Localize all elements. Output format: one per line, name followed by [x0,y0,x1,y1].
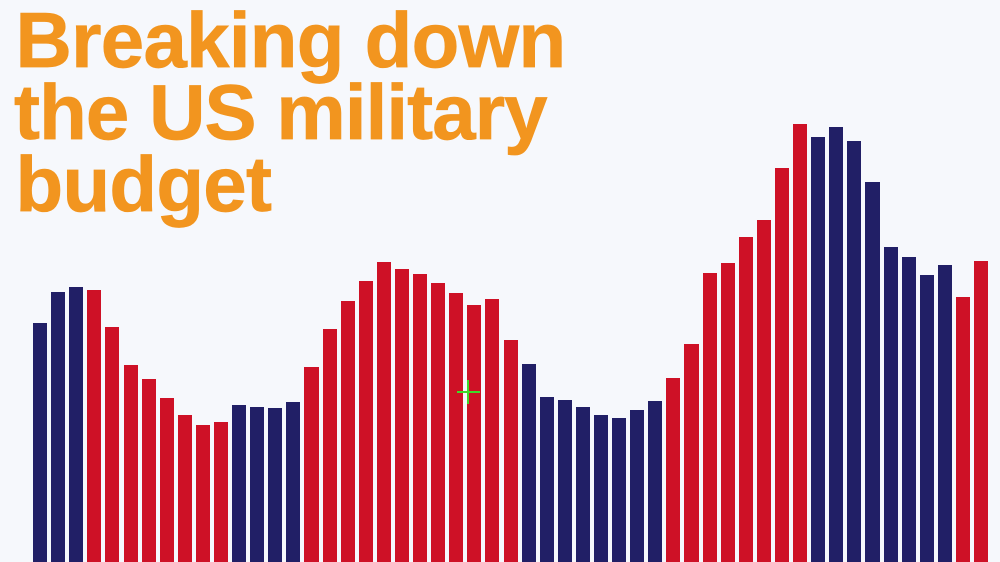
title: the US military [14,68,547,156]
title: budget [16,140,272,228]
icon: green crosshair cursor [457,380,480,404]
bar chart: military budget by year, coloured by party [33,124,988,562]
